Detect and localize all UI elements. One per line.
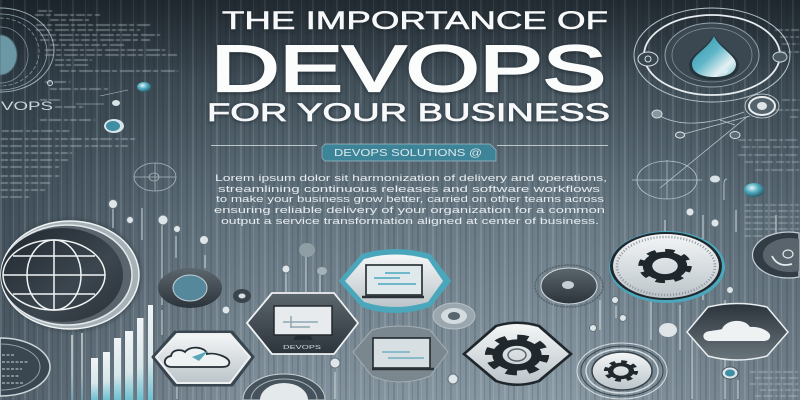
teal badge <box>322 144 496 161</box>
small outline wheel <box>134 163 176 191</box>
icon: small ring disc <box>433 303 475 329</box>
body text: to make your business grow better, carried on other teams across <box>216 194 604 205</box>
teal badge: DEVOPS SOLUTIONS @ <box>334 148 482 159</box>
icon: large gear badge <box>609 231 725 303</box>
icon: monitor dark hexagon: DEVOPS <box>283 345 322 351</box>
body text <box>214 173 607 227</box>
label: VOPS: VOPS <box>1 101 54 113</box>
icon: dark disc <box>158 268 222 308</box>
icon: monitor dark hexagon <box>247 293 358 354</box>
connector pins <box>108 200 776 399</box>
icon: globe badge <box>0 218 142 332</box>
right network nodes <box>632 52 787 200</box>
body text: ensuring reliable delivery of your organization for a common <box>214 205 605 216</box>
icon: dark dial <box>535 265 603 307</box>
divider lines <box>211 144 608 146</box>
icon: bottom ring disc <box>243 374 325 400</box>
icon: cloud hexagon <box>153 332 253 385</box>
top-left ring graphic <box>0 8 54 92</box>
right code lines <box>738 30 799 396</box>
icon: water drop in rings <box>634 8 790 102</box>
body text: output a service transformation aligned at center of business. <box>221 216 599 227</box>
title: The importance of: THE IMPORTANCE OF <box>222 7 608 35</box>
icon: cloud dark hexagon <box>687 304 788 360</box>
icon: teal laptop shield <box>340 250 450 312</box>
title: DevOps: DEVOPS <box>211 32 606 105</box>
left nodes <box>48 80 151 133</box>
body text: Lorem ipsum dolor sit harmonization of delivery and operations, <box>215 173 607 184</box>
left code lines <box>1 11 178 197</box>
icon: grey laptop hexagon <box>353 326 448 382</box>
body text: streamlining continuous releases and software workflows <box>218 184 600 195</box>
bar chart <box>71 305 153 400</box>
icon: right dark disc <box>753 232 799 278</box>
title: for your business: FOR YOUR BUSINESS <box>207 99 610 127</box>
icon: lower-left disc <box>0 338 50 396</box>
icon: gear hexagon <box>462 322 573 386</box>
icon: concentric gear <box>577 343 667 399</box>
